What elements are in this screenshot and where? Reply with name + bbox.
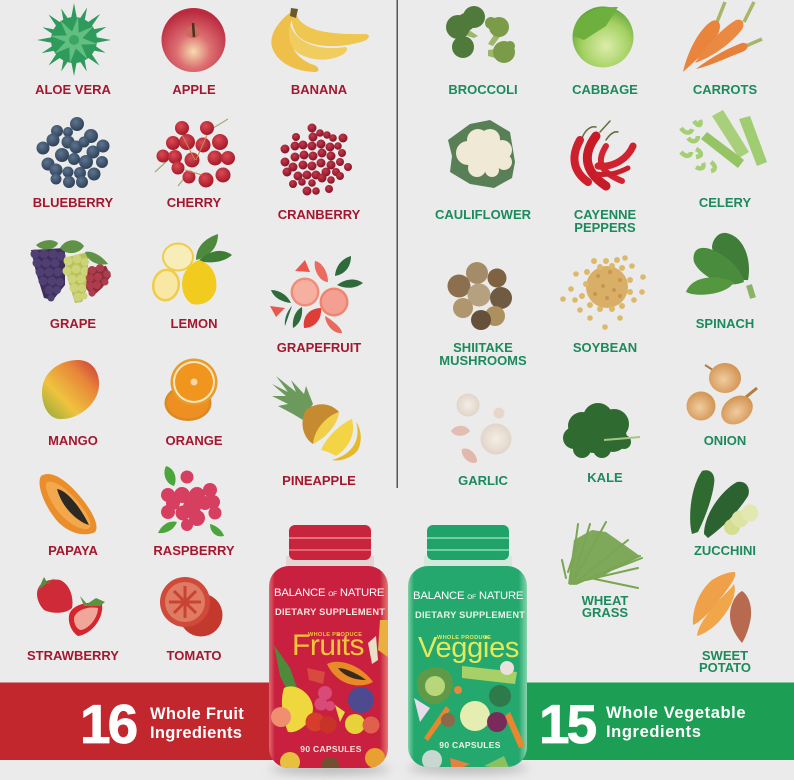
icon: cranberry <box>280 124 352 196</box>
brand: balance of nature: BALANCE OF NATURE <box>274 587 385 599</box>
item: raspberry <box>153 466 235 558</box>
bottle neck <box>286 556 374 570</box>
banner: fruit count <box>0 682 290 760</box>
label: mango: MANGO <box>48 433 98 448</box>
label: grapefruit: GRAPEFRUIT <box>277 340 361 355</box>
icon: wheat grass <box>562 522 642 588</box>
label: kale: KALE <box>587 470 623 485</box>
label: blueberry: BLUEBERRY <box>33 195 114 210</box>
label: strawberry: STRAWBERRY <box>27 648 119 663</box>
icon: pineapple <box>272 376 361 461</box>
label: broccoli: BROCCOLI <box>448 82 518 97</box>
text: whole vegetable ingredients: Whole Vegetable <box>606 704 746 722</box>
icon: celery <box>681 110 767 171</box>
item: zucchini <box>690 470 758 558</box>
label: spinach: SPINACH <box>696 316 754 331</box>
label: orange: ORANGE <box>165 433 223 448</box>
item: banana <box>271 8 369 97</box>
icon: soybean <box>560 255 646 330</box>
item: carrots <box>683 2 762 97</box>
item: spinach <box>686 233 754 331</box>
text: dietary supplement: DIETARY SUPPLEMENT <box>415 610 525 620</box>
banner: vegetable count <box>510 682 794 760</box>
item: soybean <box>560 255 646 355</box>
item: cabbage <box>572 6 638 97</box>
label: shiitake mushrooms: MUSHROOMS <box>439 353 527 368</box>
icon: sweet potato <box>693 572 751 643</box>
label: cayenne peppers: CAYENNE <box>574 207 636 222</box>
bottle cap <box>427 525 509 560</box>
item: cherry <box>155 119 235 210</box>
icon: raspberry <box>158 466 224 536</box>
text: 90 capsules: 90 CAPSULES <box>439 740 501 750</box>
bottle: fruits <box>269 525 392 775</box>
text: whole fruit ingredients: Ingredients <box>150 724 242 742</box>
icon: cabbage <box>572 6 634 68</box>
icon: spinach <box>686 233 753 298</box>
label: papaya: PAPAYA <box>48 543 99 558</box>
item: strawberry <box>27 577 119 663</box>
text: whole produce: WHOLE PRODUCE <box>308 632 362 638</box>
icon: papaya <box>40 474 96 534</box>
text: whole vegetable ingredients: Ingredients <box>606 723 702 741</box>
label: cauliflower: CAULIFLOWER <box>435 207 532 222</box>
label: cabbage: CABBAGE <box>572 82 638 97</box>
label: wheat grass: WHEAT <box>582 593 628 608</box>
label artwork: fruits <box>271 620 392 775</box>
label: grape: GRAPE <box>50 316 96 331</box>
icon: cauliflower <box>448 120 515 188</box>
text: whole produce: WHOLE PRODUCE <box>437 635 491 641</box>
item: kale <box>563 403 640 485</box>
icon: zucchini <box>690 470 758 538</box>
bottle shadows <box>270 763 528 774</box>
icon: carrots <box>683 2 762 72</box>
item: cayenne peppers <box>574 121 637 235</box>
text: whole fruit ingredients: Whole Fruit <box>150 705 244 723</box>
label: celery: CELERY <box>699 195 751 210</box>
item: pineapple <box>272 376 361 488</box>
label artwork: veggies <box>414 661 525 772</box>
label: onion: ONION <box>704 433 746 448</box>
item: shiitake mushrooms <box>439 262 527 368</box>
bottle neck <box>424 556 512 570</box>
number: 16: 16 <box>80 693 137 755</box>
item: garlic <box>451 394 512 488</box>
item: lemon <box>149 234 232 331</box>
icon: garlic <box>451 394 512 463</box>
label: sweet potato: POTATO <box>699 660 751 675</box>
item: blueberry <box>33 117 114 210</box>
panel: vegetables ingredients <box>435 2 767 675</box>
item: cauliflower <box>435 120 532 222</box>
icon: cayenne peppers <box>574 121 633 186</box>
panel: fruits ingredients <box>27 3 369 663</box>
text: 90 capsules: 90 CAPSULES <box>300 744 362 754</box>
icon: grapefruit <box>270 256 363 333</box>
item: sweet potato <box>693 572 751 675</box>
icon: orange <box>164 358 218 421</box>
icon: grape <box>30 240 111 303</box>
icon: kale <box>563 403 640 458</box>
label: pineapple: PINEAPPLE <box>282 473 356 488</box>
item: orange <box>164 358 223 448</box>
label: lemon: LEMON <box>171 316 217 331</box>
icon: mango <box>42 360 99 419</box>
text: dietary supplement: DIETARY SUPPLEMENT <box>275 607 385 617</box>
item: papaya <box>40 474 99 558</box>
label: cranberry: CRANBERRY <box>278 207 361 222</box>
icon: shiitake mushrooms <box>448 262 512 330</box>
label: cayenne peppers: PEPPERS <box>574 220 636 235</box>
item: onion <box>686 363 758 448</box>
item: tomato <box>160 577 222 663</box>
item: grapefruit <box>270 256 363 355</box>
icon: blueberry <box>36 117 110 188</box>
label: raspberry: RASPBERRY <box>153 543 235 558</box>
icon: tomato <box>160 577 222 636</box>
icon: cherry <box>155 119 235 188</box>
icon: apple <box>162 8 226 72</box>
item: grape <box>30 240 111 331</box>
item: celery <box>681 110 767 210</box>
bottle cap <box>289 525 371 560</box>
label: banana: BANANA <box>291 82 348 97</box>
brand: balance of nature: BALANCE OF NATURE <box>413 590 524 602</box>
bottle body <box>269 566 388 768</box>
label: soybean: SOYBEAN <box>573 340 637 355</box>
item: apple <box>162 8 226 97</box>
icon: aloe vera <box>37 3 111 76</box>
label: apple: APPLE <box>172 82 216 97</box>
item: mango <box>42 360 99 448</box>
title: veggies: Veggies <box>418 632 519 664</box>
label: wheat grass: GRASS <box>582 605 628 620</box>
icon: banana <box>271 8 369 72</box>
label: aloe vera: ALOE VERA <box>35 82 112 97</box>
bottle body <box>408 566 527 767</box>
icon: strawberry <box>37 577 105 636</box>
label: zucchini: ZUCCHINI <box>694 543 756 558</box>
center divider line <box>396 0 398 488</box>
item: broccoli <box>446 6 518 97</box>
icon: onion <box>686 363 758 430</box>
icon: lemon <box>149 234 232 304</box>
number: 15: 15 <box>539 693 597 755</box>
item: aloe vera <box>35 3 112 97</box>
label: sweet potato: SWEET <box>702 648 748 663</box>
label: cherry: CHERRY <box>167 195 222 210</box>
label: carrots: CARROTS <box>693 82 757 97</box>
label: shiitake mushrooms: SHIITAKE <box>453 340 513 355</box>
title: fruits: Fruits <box>292 629 364 662</box>
icon: broccoli <box>446 6 515 63</box>
item: wheat grass <box>562 522 642 620</box>
label: tomato: TOMATO <box>167 648 221 663</box>
bottle: veggies <box>408 525 527 772</box>
label: garlic: GARLIC <box>458 473 509 488</box>
item: cranberry <box>278 124 361 222</box>
